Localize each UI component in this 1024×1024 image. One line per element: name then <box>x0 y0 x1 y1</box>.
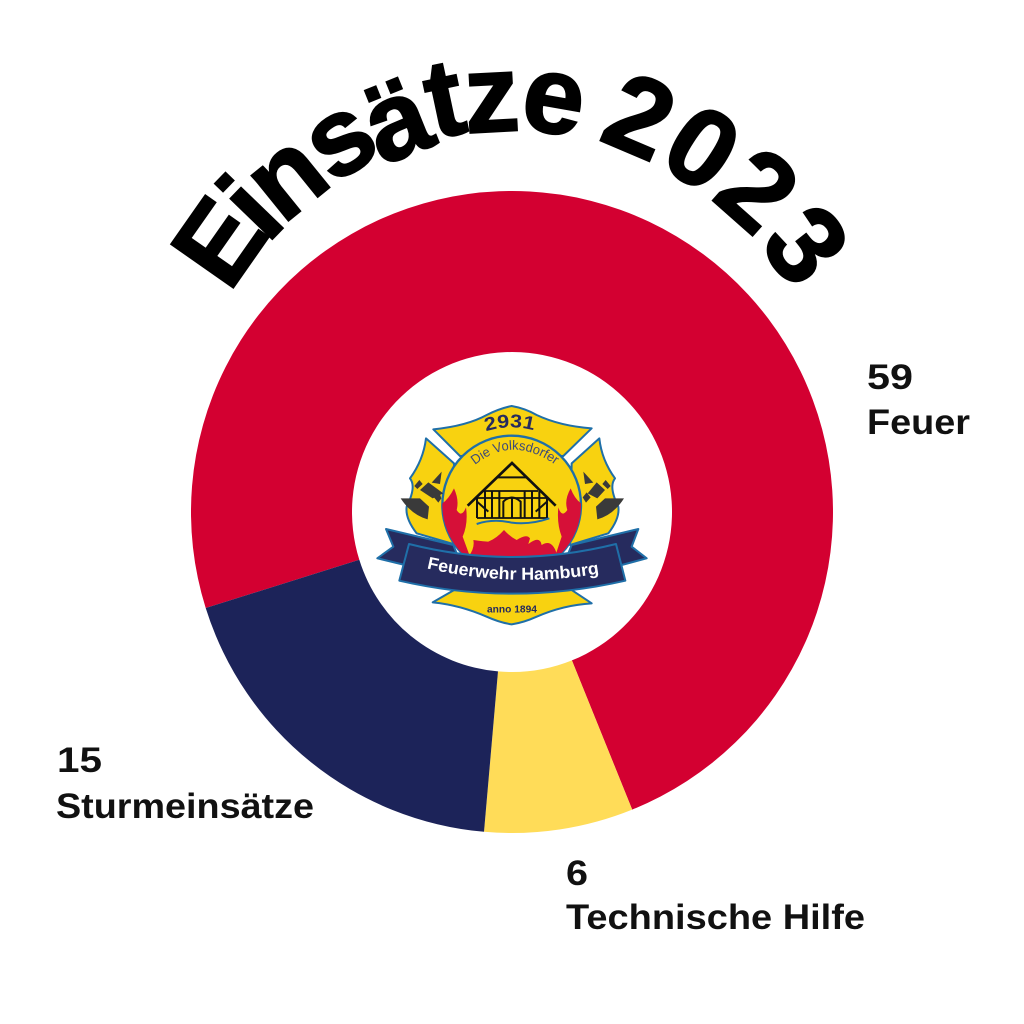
axe left <box>401 472 443 519</box>
badge text: Feuerwehr Hamburg: Feuerwehr Hamburg <box>428 557 598 580</box>
flames <box>442 488 581 556</box>
house <box>468 463 556 518</box>
badge centre circle <box>442 436 581 574</box>
badge arms <box>406 406 619 624</box>
slice: Technische Hilfe 6 <box>484 660 632 833</box>
badge text: Die Volksdorfer: Die Volksdorfer <box>470 440 559 464</box>
water line <box>477 518 549 524</box>
title: Einsätze 2023 <box>148 30 873 307</box>
label: Sturmeinsätze: 15 <box>57 741 102 780</box>
label: Technische Hilfe <box>566 854 865 937</box>
badge text: anno 1894: anno 1894 <box>487 604 537 615</box>
label: Technische Hilfe: 6 <box>566 854 588 893</box>
logo: Feuerwehr Hamburg badge <box>376 405 648 626</box>
label: Feuer: Feuer <box>867 403 970 442</box>
label: Sturmeinsätze <box>56 741 314 826</box>
banner front <box>399 544 625 594</box>
banner tails <box>377 529 647 565</box>
badge text: 2931: 2931 <box>484 414 534 431</box>
slice: Sturmeinsätze 15 <box>206 560 498 832</box>
slice: Feuer 59 <box>191 191 833 810</box>
label: Sturmeinsätze: Sturmeinsätze <box>56 787 314 826</box>
donut chart <box>191 191 833 833</box>
label: Feuer: 59 <box>867 358 913 397</box>
axe right <box>583 472 624 519</box>
label: Feuer <box>867 358 970 442</box>
label: Technische Hilfe: Technische Hilfe <box>566 898 865 937</box>
